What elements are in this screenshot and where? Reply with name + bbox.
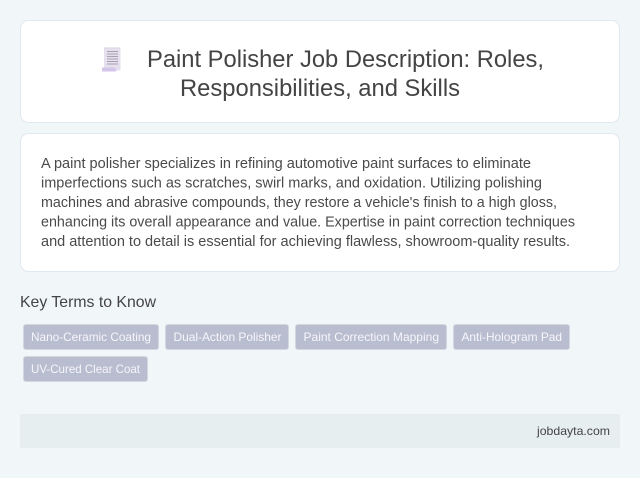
panel: title header xyxy=(20,20,620,122)
tag: Paint Correction Mapping xyxy=(296,324,446,350)
tag: UV-Cured Clear Coat: UV-Cured Clear Coat xyxy=(31,362,141,376)
title: Responsibilities, and Skills xyxy=(180,75,460,102)
footer xyxy=(20,414,620,448)
tag: Paint Correction Mapping: Paint Correction Mapping xyxy=(304,330,439,344)
panel: description xyxy=(20,134,620,272)
tag: Dual-Action Polisher xyxy=(166,324,288,350)
tag: UV-Cured Clear Coat xyxy=(24,356,148,382)
tag: Anti-Hologram Pad: Anti-Hologram Pad xyxy=(462,330,562,344)
tag: Nano-Ceramic Coating xyxy=(24,324,158,350)
heading: key terms: Key Terms to Know xyxy=(20,294,156,311)
description text: A paint polisher specializes in refining automotive paint surfaces to eliminate xyxy=(41,156,531,172)
title xyxy=(147,46,544,102)
description text xyxy=(41,156,575,250)
description text: and attention to detail is essential for achieving flawless, showroom-quality results. xyxy=(41,234,570,250)
tag: Nano-Ceramic Coating: Nano-Ceramic Coating xyxy=(31,330,151,344)
tag: Anti-Hologram Pad xyxy=(454,324,570,350)
title: Paint Polisher Job Description: Roles, xyxy=(147,46,544,73)
footer: jobdayta.com xyxy=(536,424,610,438)
description text: enhancing its overall appearance and value. Expertise in paint correction techniques xyxy=(41,214,575,230)
description text: machines and abrasive compounds, they restore a vehicle's finish to a high gloss, xyxy=(41,195,557,211)
description text: imperfections such as scratches, swirl marks, and oxidation. Utilizing polishing xyxy=(41,176,542,192)
icon: paper scroll document xyxy=(102,48,120,72)
tag: Dual-Action Polisher: Dual-Action Polisher xyxy=(174,330,282,344)
